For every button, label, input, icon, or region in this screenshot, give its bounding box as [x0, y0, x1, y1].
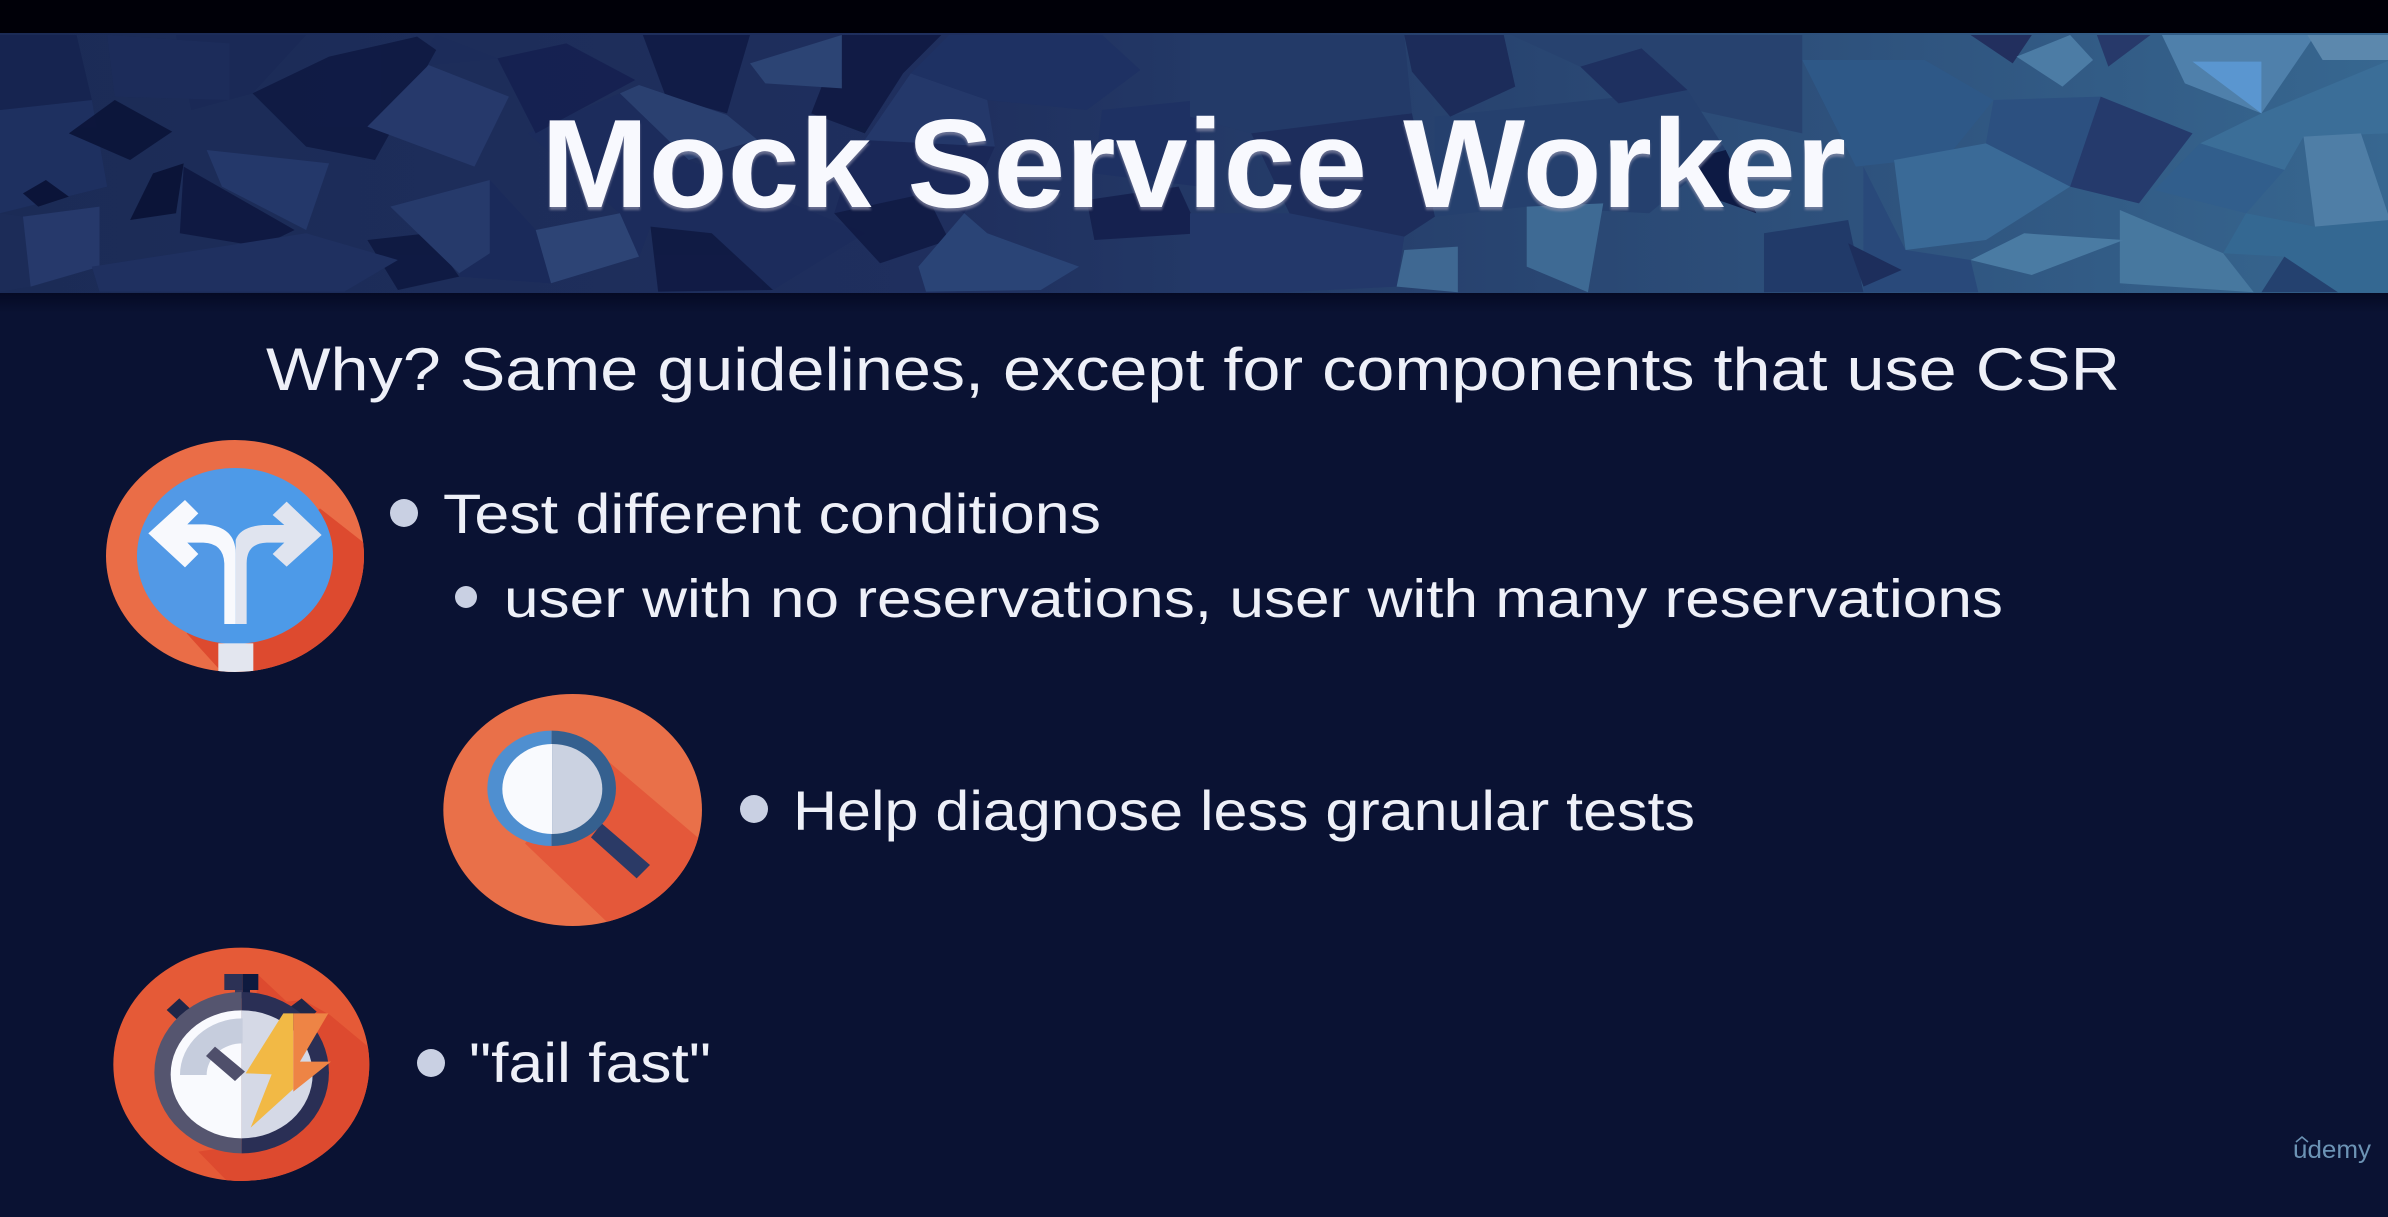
icon: magnifying glass [443, 694, 707, 933]
udemy logo: udemy [2293, 1136, 2372, 1164]
top black bar [0, 0, 2388, 33]
header banner: polygon collage [0, 33, 2388, 293]
icon: stopwatch with lightning bolt [113, 948, 383, 1188]
sub-bullet: user reservations: user with no reservations, user with many reservations [504, 569, 2003, 629]
bullet: help diagnose: Help diagnose less granular tests [793, 779, 1695, 842]
header bottom shadow band [0, 293, 2388, 313]
bullet: test different conditions: Test different conditions [443, 482, 1101, 545]
subtitle: Why? Same guidelines, except for components that use CSR [266, 336, 2120, 403]
icon: road sign with forking arrows [106, 440, 377, 677]
title: Mock Service Worker [541, 93, 1846, 234]
bullet: fail fast: "fail fast" [469, 1031, 711, 1094]
